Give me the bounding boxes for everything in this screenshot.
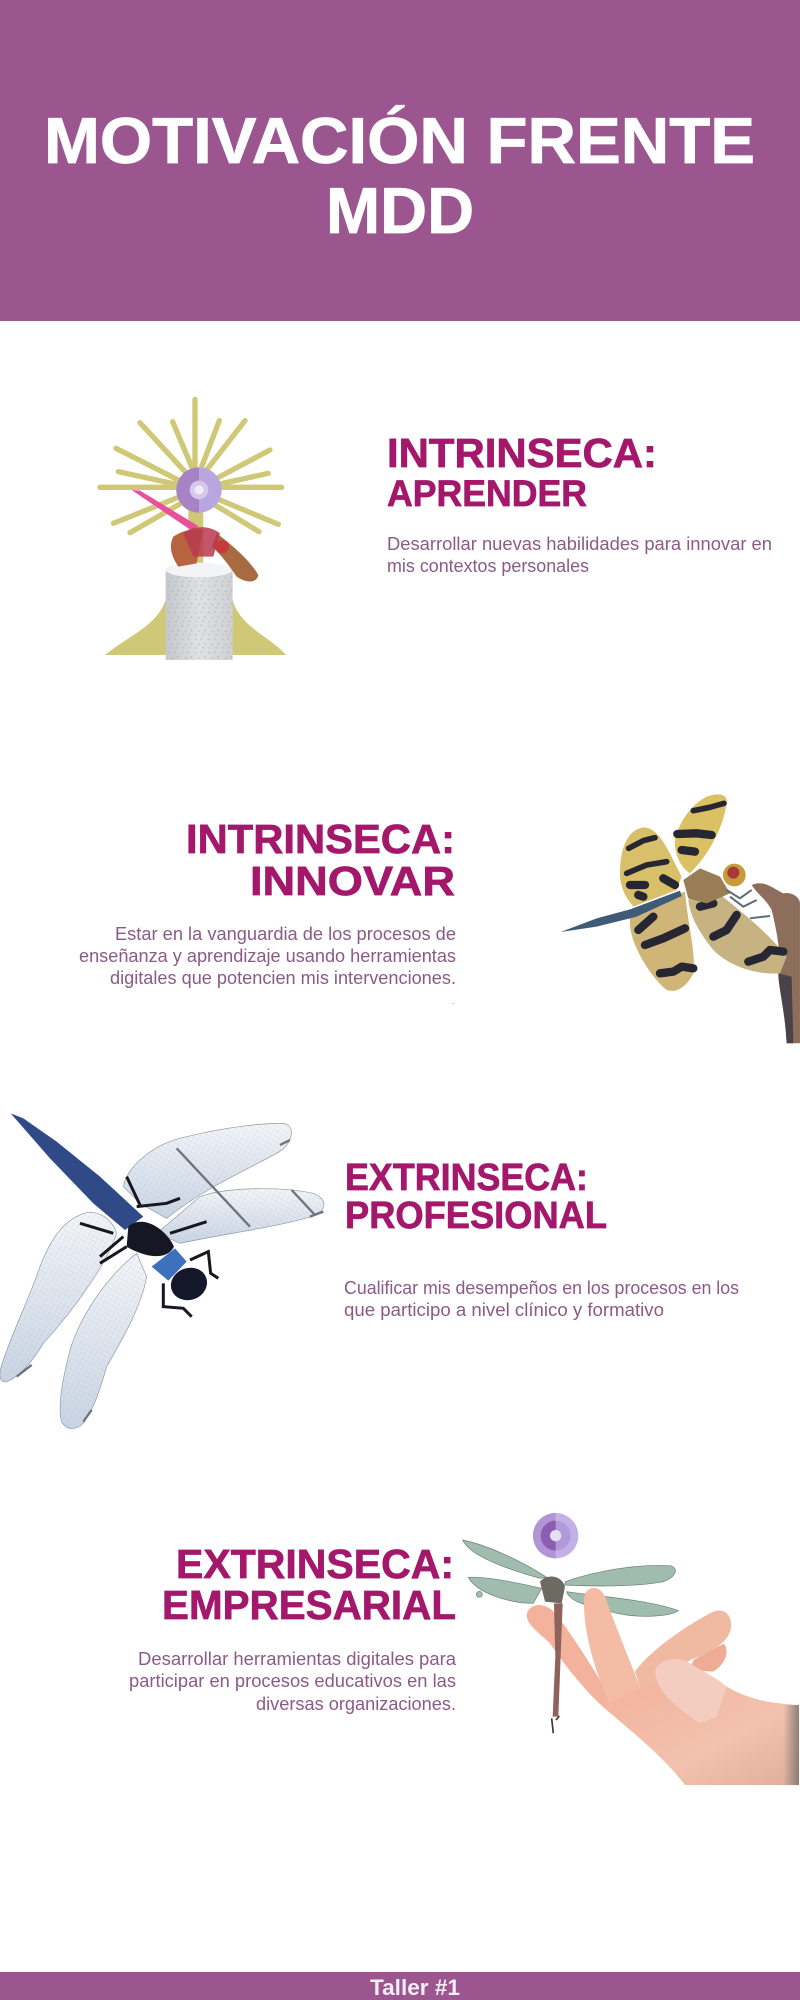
icon: thumb <box>655 1659 727 1723</box>
icon: pillar <box>166 563 233 660</box>
icon: dragonfly thorax <box>683 868 730 903</box>
heading: intrinseca aprender: APRENDER <box>387 473 587 514</box>
icon: dragonfly abdomen <box>11 1113 143 1230</box>
text: innovar description: . <box>452 997 454 1006</box>
icon: golden base <box>105 600 286 655</box>
heading: intrinseca aprender: INTRINSECA: <box>387 430 657 476</box>
text: profesional description: Cualificar mis desempeños en los procesos en los <box>344 1278 739 1298</box>
icon: golden sun rays <box>100 399 282 533</box>
icon: dragonfly thorax <box>127 1222 174 1256</box>
icon: dragonfly wings <box>0 1124 324 1429</box>
text: aprender description: Desarrollar nuevas habilidades para innovar en <box>387 534 772 554</box>
icon: dragonfly head <box>166 1263 212 1305</box>
heading: extrinseca empresarial: EXTRINSECA: <box>176 1541 454 1587</box>
icon: red dragonfly <box>132 490 258 581</box>
icon: dragonfly body <box>540 1576 565 1733</box>
heading: intrinseca innovar: INNOVAR <box>250 858 455 904</box>
text: profesional description <box>344 1278 739 1320</box>
heading: extrinseca empresarial <box>162 1541 456 1628</box>
footer band <box>0 1972 800 2000</box>
icon: wing veins <box>0 1124 324 1429</box>
text: empresarial description: participar en procesos educativos en las <box>129 1671 456 1691</box>
icon: dragonfly wings <box>463 1540 678 1616</box>
text: innovar description <box>79 924 456 1006</box>
icon: purple circle <box>176 467 222 513</box>
icon: wing bars <box>17 1140 323 1422</box>
panel: blue dragonfly illustration <box>0 1113 324 1429</box>
heading: intrinseca innovar <box>186 816 455 904</box>
title <box>44 104 755 247</box>
text: aprender description <box>387 534 772 576</box>
text: innovar description: digitales que potencien mis intervenciones. <box>110 968 456 988</box>
text: empresarial description <box>129 1649 457 1714</box>
heading: extrinseca profesional <box>345 1157 607 1237</box>
heading: extrinseca profesional: EXTRINSECA: <box>345 1157 588 1199</box>
icon: dragonfly legs <box>727 890 770 918</box>
heading: extrinseca profesional: PROFESIONAL <box>345 1195 607 1237</box>
icon: wing stripes <box>627 803 783 973</box>
heading: intrinseca innovar: INTRINSECA: <box>186 816 455 862</box>
icon: branch <box>752 883 800 1043</box>
icon: dragonfly head <box>723 864 746 886</box>
title: MOTIVACIÓN FRENTE <box>44 104 755 177</box>
footer text: Taller #1 <box>370 1975 460 2000</box>
text: empresarial description: Desarrollar herramientas digitales para <box>138 1649 457 1669</box>
text: innovar description: enseñanza y aprendizaje usando herramientas <box>79 946 456 966</box>
text: aprender description: mis contextos personales <box>387 556 589 576</box>
text: innovar description: Estar en la vanguardia de los procesos de <box>115 924 456 944</box>
icon: dragonfly legs <box>80 1177 218 1317</box>
icon: hand <box>527 1605 799 1785</box>
text: empresarial description: diversas organizaciones. <box>256 1694 456 1714</box>
text: profesional description: que participo a nivel clínico y formativo <box>344 1300 664 1320</box>
icon: front finger <box>584 1588 640 1703</box>
panel: intrinseca aprender illustration <box>100 399 286 660</box>
title: MDD <box>326 174 474 247</box>
icon: purple circle <box>533 1513 578 1558</box>
heading: extrinseca empresarial: EMPRESARIAL <box>162 1582 456 1628</box>
header band <box>0 0 800 321</box>
icon: dragonfly wings <box>620 794 787 991</box>
icon: dragonfly abdomen <box>561 891 682 932</box>
panel: yellow dragonfly illustration <box>561 794 800 1043</box>
panel: hand with dragonfly illustration <box>463 1513 799 1785</box>
heading: intrinseca aprender <box>387 430 657 514</box>
